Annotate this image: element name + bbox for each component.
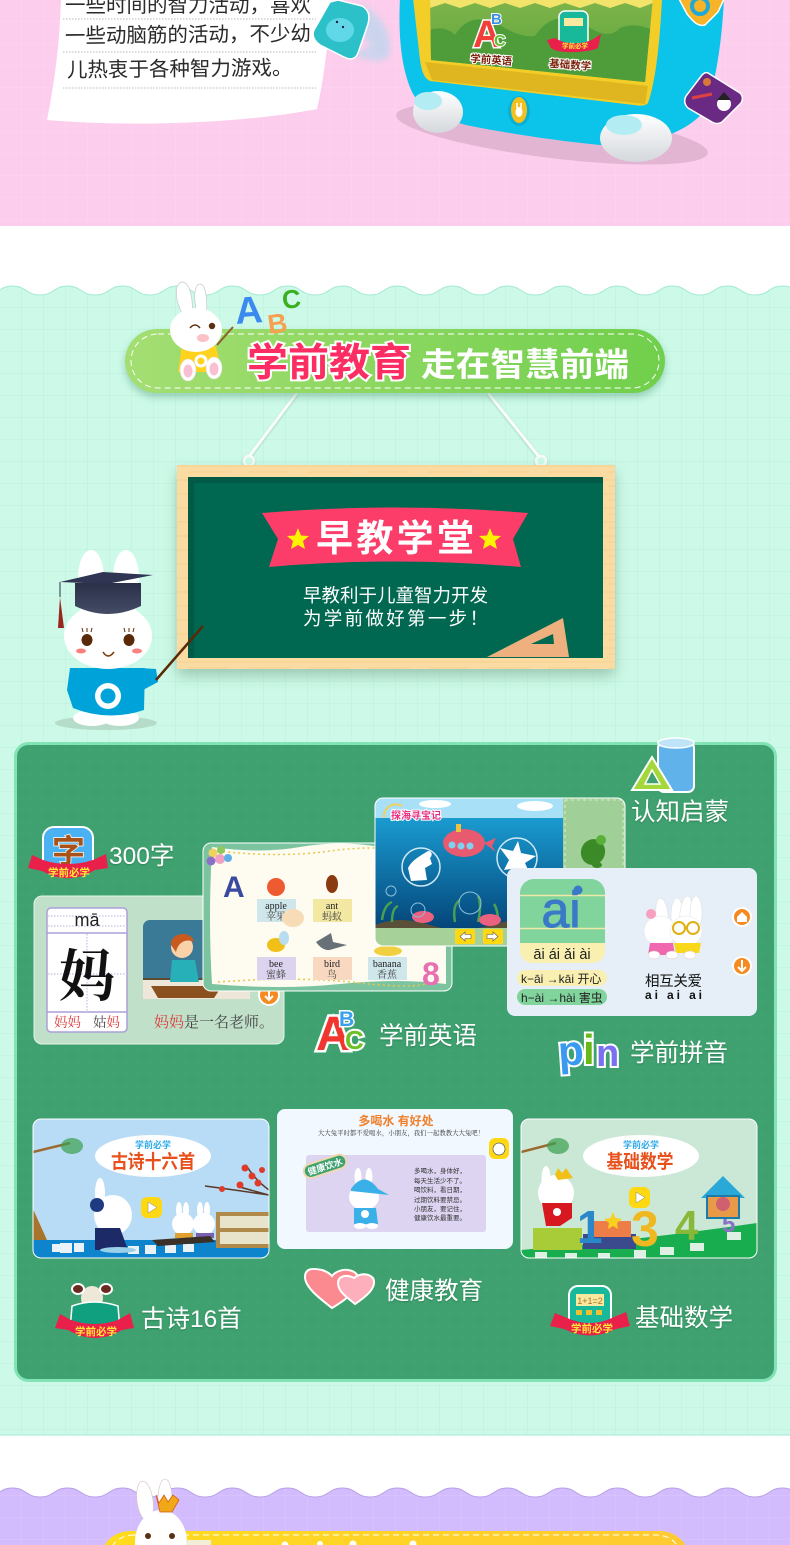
clock house	[701, 1176, 745, 1218]
tag: healthy drinking	[302, 1153, 348, 1180]
cloud title: 基础数学	[606, 1150, 674, 1173]
illustration: rabbit with yellow shirt	[170, 282, 233, 381]
sad face button	[489, 1138, 509, 1159]
screen icon: ABC: 学前英语	[470, 52, 513, 68]
button: left arrow	[455, 929, 475, 944]
game card: rabbit	[313, 0, 390, 60]
bubble: polar bear	[402, 848, 440, 886]
icon: calculator: 1+1=2	[577, 1296, 603, 1306]
icon: poetry bag	[55, 1284, 134, 1338]
screen icon: math: 学前必学	[562, 41, 588, 50]
icon: ABC logo: B	[339, 1008, 354, 1031]
card: pinyin lesson	[507, 868, 757, 1016]
vocab: banana: banana	[373, 959, 402, 970]
heading: white subtitle: 走在智慧前端	[421, 346, 629, 383]
text: blackboard copy: 早教利于儿童智力开发	[303, 585, 488, 606]
numbers: 1 3 4 5	[577, 1201, 735, 1257]
vocab: bee	[257, 931, 296, 981]
heading: pink title: 学前教育	[247, 342, 411, 385]
pinyin example: kai: k−āi →kāi 开心	[521, 972, 601, 986]
pinyin tile: ai	[542, 882, 580, 938]
vocab: bird: bird	[324, 959, 340, 970]
vocab: bird	[313, 933, 352, 981]
rabbit teacher	[90, 1178, 136, 1253]
text: health rhyme: 健康饮水最重要。	[414, 1213, 466, 1222]
icon: pin logo: n	[596, 1033, 619, 1075]
button: rabbit home	[508, 96, 530, 126]
cloud title: 古诗十六首	[111, 1150, 195, 1173]
label: basic math: 基础数学	[635, 1304, 733, 1332]
section background: pink	[0, 0, 790, 226]
screen icon: ABC: C	[494, 33, 506, 50]
icon: cognition cylinder and triangle	[632, 738, 694, 792]
letters: A B C	[234, 283, 303, 340]
rabbit students	[152, 1202, 215, 1246]
card: basic math	[521, 1119, 757, 1259]
label: preschool pinyin: 学前拼音	[630, 1039, 728, 1067]
text: blackboard copy: 为学前做好第一步！	[303, 608, 488, 629]
text: note paragraph	[65, 0, 311, 82]
drinking rabbit	[349, 1168, 389, 1229]
text: health rhyme: 过期饮料要禁忌。	[414, 1195, 466, 1204]
icon: character badge: 学前必学	[48, 866, 90, 879]
health intro: 大大兔平时都不爱喝水，小朋友，我们一起教教大大兔吧！	[318, 1128, 484, 1137]
card: poems	[33, 1119, 269, 1258]
graduation cap	[58, 572, 153, 628]
pinyin example: hai: h−ài →hài 害虫	[521, 990, 603, 1005]
numbers: 1 3 4 5: 4	[675, 1202, 699, 1249]
label: health education: 健康教育	[385, 1277, 483, 1305]
button: play	[141, 1197, 162, 1218]
letters: A B C: B	[266, 308, 289, 340]
text: health rhyme	[414, 1166, 466, 1222]
vocab: apple	[257, 878, 304, 927]
numbers: 1 3 4 5: 3	[631, 1201, 659, 1257]
card: English lesson	[203, 843, 452, 992]
text: example sentence: 妈妈是一名老师。	[154, 1013, 274, 1031]
health title: 多喝水 有好处	[358, 1113, 434, 1128]
star	[604, 1212, 622, 1229]
text: note paragraph: 一些动脑筋的活动，不少幼	[65, 22, 311, 48]
text: health rhyme: 多喝水，身体好，	[414, 1166, 466, 1175]
balloons and letter A	[206, 846, 245, 904]
letter B character: 8	[422, 956, 440, 992]
screen icon: math: 基础数学	[549, 57, 592, 73]
card: ocean game	[375, 798, 625, 946]
game card: night scene	[685, 73, 742, 124]
screen icon: math	[547, 11, 601, 73]
vocab: bee: 蜜蜂	[266, 968, 286, 981]
icon: calculator	[550, 1286, 630, 1336]
screen hills	[430, 0, 653, 90]
icon: hearts	[305, 1269, 374, 1308]
screen icon: ABC	[470, 11, 513, 68]
vocab: apple: 苹果	[266, 910, 286, 923]
section background: purple with scalloped edge	[0, 1488, 790, 1545]
cloud title: 学前必学	[623, 1139, 659, 1150]
letters: A B C: C	[280, 283, 303, 315]
word grid: 妈	[59, 947, 115, 1009]
word grid: 妈妈	[54, 1015, 81, 1030]
illustration: graduate rabbit	[55, 550, 203, 730]
vocab: ant	[313, 875, 352, 923]
icon: pin logo	[556, 1026, 619, 1075]
vocab: ant: ant	[326, 901, 338, 912]
turtle	[577, 835, 609, 868]
text: health rhyme: 每天生活少不了。	[414, 1176, 466, 1185]
game title	[384, 804, 441, 822]
vocab: ant: 蚂蚁	[322, 910, 342, 923]
game title: 探海寻宝记	[391, 809, 441, 822]
vocab: banana	[368, 946, 407, 981]
vocab: banana: 香蕉	[377, 968, 397, 981]
pinyin tile	[520, 879, 605, 963]
screen icon: ABC: A	[473, 14, 500, 56]
numbers: 1 3 4 5: 1	[577, 1201, 603, 1253]
illustration: teacher	[143, 920, 250, 999]
letters: A B C: A	[234, 289, 264, 333]
section heading banner	[125, 329, 665, 393]
tag: healthy drinking: 健康饮水	[306, 1156, 344, 1177]
word grid: 姑妈	[93, 1015, 120, 1030]
icon: calculator: 学前必学	[571, 1322, 613, 1335]
icon: set square	[487, 618, 569, 657]
section background: mint with scalloped edge	[0, 286, 790, 1435]
button: down arrow	[259, 985, 279, 1005]
cloud title: 学前必学	[135, 1139, 171, 1150]
vocab: bee: bee	[269, 959, 283, 970]
icon: ABC logo: A	[316, 1008, 351, 1061]
icon: character badge: 字	[52, 833, 85, 870]
button: down arrow	[733, 957, 751, 975]
text: health rhyme: 喝饮料，看日期，	[414, 1185, 466, 1194]
numbers: 1 3 4 5: 5	[722, 1211, 735, 1238]
button: right arrow	[483, 929, 503, 944]
banner: early learning hall	[262, 508, 528, 567]
balloons and letter A: A	[223, 871, 245, 904]
label: 300 characters: 300字	[109, 842, 174, 870]
next section heading banner	[100, 1531, 690, 1545]
label: 16 ancient poems: 古诗16首	[141, 1305, 242, 1333]
blackboard	[177, 465, 615, 669]
bubble: starfish	[497, 838, 537, 878]
text: caring rhyme: 相互关爱	[645, 973, 702, 990]
card: character lesson	[34, 896, 284, 1044]
cloud title	[583, 1135, 699, 1177]
text: blackboard copy	[303, 585, 488, 629]
tablet right foot	[600, 114, 672, 162]
game card: letter C	[678, 0, 725, 25]
vocab: bird: 鸟	[327, 968, 337, 981]
icon: pin logo: i	[583, 1026, 595, 1073]
banner: early learning hall: 早教学堂	[316, 518, 474, 559]
crowned rabbit	[538, 1166, 574, 1226]
submarine	[443, 824, 496, 857]
illustration: crowned rabbit	[134, 1479, 211, 1545]
illustration: two rabbits	[644, 895, 702, 959]
icon: character badge	[28, 827, 108, 879]
icon: poetry bag: 学前必学	[75, 1325, 117, 1338]
text: caring rhyme: ai ai ai	[645, 988, 702, 1002]
tablet left foot	[413, 91, 463, 133]
text: caring rhyme	[645, 973, 702, 1002]
icon: pin logo: p	[556, 1026, 585, 1075]
screen icon: ABC: B	[491, 11, 502, 28]
word grid	[47, 908, 127, 1032]
illustration: tablet toy	[313, 0, 742, 177]
text: note paragraph: 儿热衷于各种智力游戏。	[67, 57, 293, 82]
button: play	[629, 1187, 650, 1208]
panel: paper note	[47, 0, 333, 124]
purple lesson panel	[306, 1155, 486, 1232]
seaweed and coral	[382, 886, 501, 926]
label: preschool English: 学前英语	[379, 1022, 477, 1050]
icon: ABC logo: C	[345, 1025, 364, 1055]
card: health education	[277, 1109, 513, 1249]
panel: green content board	[16, 744, 776, 1380]
cloud title	[95, 1135, 211, 1177]
label: cognition: 认知启蒙	[631, 798, 729, 826]
word grid: mā	[74, 910, 100, 930]
button: home	[733, 908, 751, 926]
vocab: apple: apple	[265, 901, 287, 912]
text: health rhyme: 小朋友，要记住，	[414, 1204, 466, 1213]
hanging strings	[244, 393, 546, 466]
pinyin tile: āi ái ǎi ài	[533, 947, 591, 963]
